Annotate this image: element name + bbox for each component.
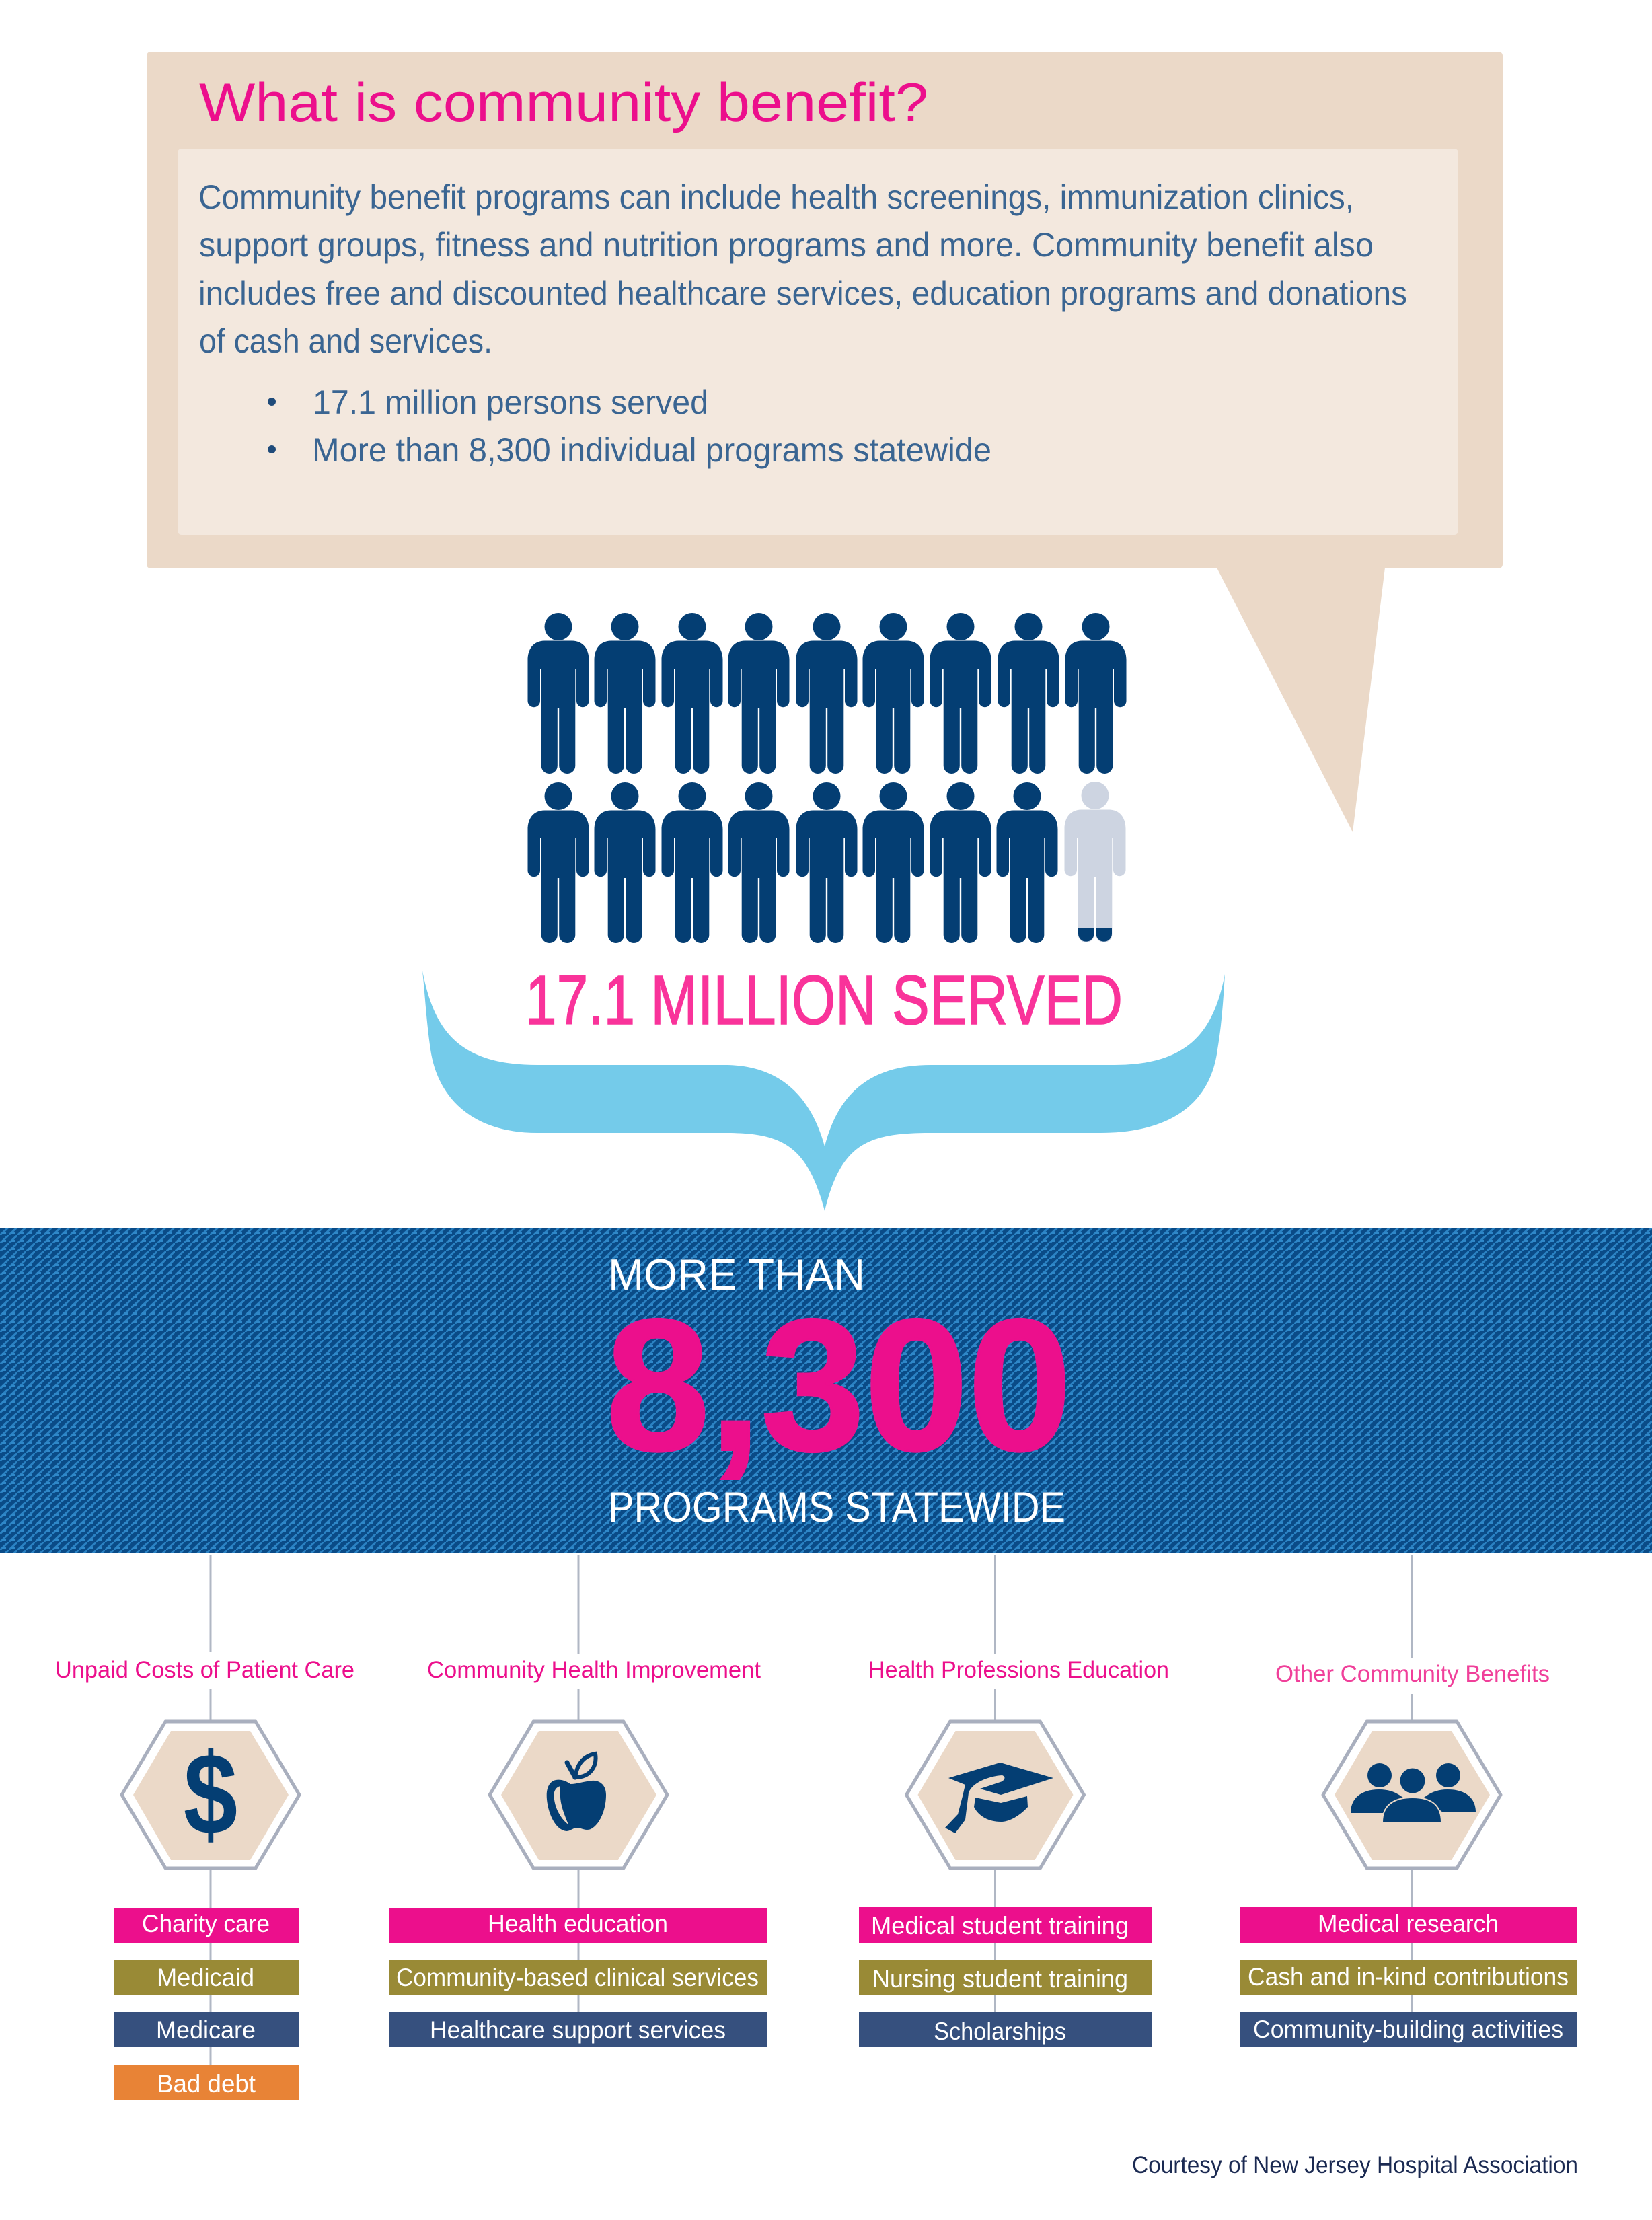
column heading: Health Professions Education [868,1657,1169,1683]
textured programs band [0,1228,1652,1553]
bubble tail [1217,568,1385,832]
credit line: Courtesy of New Jersey Hospital Association [1132,2152,1578,2178]
bar: bad debt: Bad debt [157,2070,256,2098]
curly brace [422,971,1225,1211]
bar: community-based clinical services: Community-based clinical services [396,1964,759,1991]
programs statewide label: PROGRAMS STATEWIDE [608,1484,1065,1531]
bar: healthcare support services [389,2012,767,2047]
bar: medical research: Medical research [1318,1910,1499,1937]
bar: charity care: Charity care [142,1910,270,1937]
17.1 million served heading: 17.1 MILLION SERVED [525,961,1123,1039]
bubble outer box [147,52,1503,568]
description text: includes free and discounted healthcare services, education programs and donations [198,274,1407,312]
bar: healthcare support services: Healthcare support services [430,2016,726,2044]
column: other community benefits [1240,1555,1577,2047]
bar: medicare: Medicare [156,2016,256,2044]
column heading: Other Community Benefits [1275,1661,1550,1687]
hexagon with dollar icon: $ [184,1729,237,1859]
speech bubble panel [147,52,1503,832]
bar: bad debt [114,2065,299,2100]
hexagon with dollar icon [122,1722,299,1868]
column: unpaid costs of patient care [55,1555,354,2100]
hexagon with group icon [1323,1722,1501,1868]
bullet list [268,383,991,469]
bar: medicaid [114,1960,299,1995]
hexagon with graduation cap icon [907,1722,1084,1868]
bar: medical student training [859,1907,1152,1943]
bullet list: More than 8,300 individual programs statewide [312,431,991,469]
bar: health education [389,1908,767,1943]
bullet list: 17.1 million persons served [313,383,708,421]
bar: medical student training: Medical student training [871,1912,1129,1939]
column: community health improvement [389,1555,767,2047]
column heading: Community Health Improvement [427,1657,761,1683]
more than label: MORE THAN [608,1250,865,1299]
hexagon with apple icon [490,1722,667,1868]
bar: medical research [1240,1907,1577,1943]
bar: health education: Health education [488,1910,668,1937]
bar: scholarships [859,2012,1152,2047]
bar: nursing student training: Nursing student training [872,1965,1128,1993]
bar: medicare [114,2012,299,2047]
description text: support groups, fitness and nutrition programs and more. Community benefit also [199,226,1374,264]
description text [198,178,1407,360]
column heading: Unpaid Costs of Patient Care [55,1657,354,1683]
bar: charity care [114,1908,299,1943]
people pictogram [527,613,1126,943]
description text: of cash and services. [199,322,492,360]
column: health professions education [859,1555,1169,2047]
bar: scholarships: Scholarships [934,2018,1066,2045]
bar: medicaid: Medicaid [157,1964,254,1991]
title: What is community benefit? [199,73,928,133]
bar: cash and in-kind contributions: Cash and in-kind contributions [1248,1963,1569,1991]
bar: community-building activities: Community-building activities [1253,2015,1563,2043]
8,300 figure: 8,300 [606,1280,1072,1489]
bubble inner box [178,149,1458,535]
description text: Community benefit programs can include health screenings, immunization clinics, [198,178,1354,216]
